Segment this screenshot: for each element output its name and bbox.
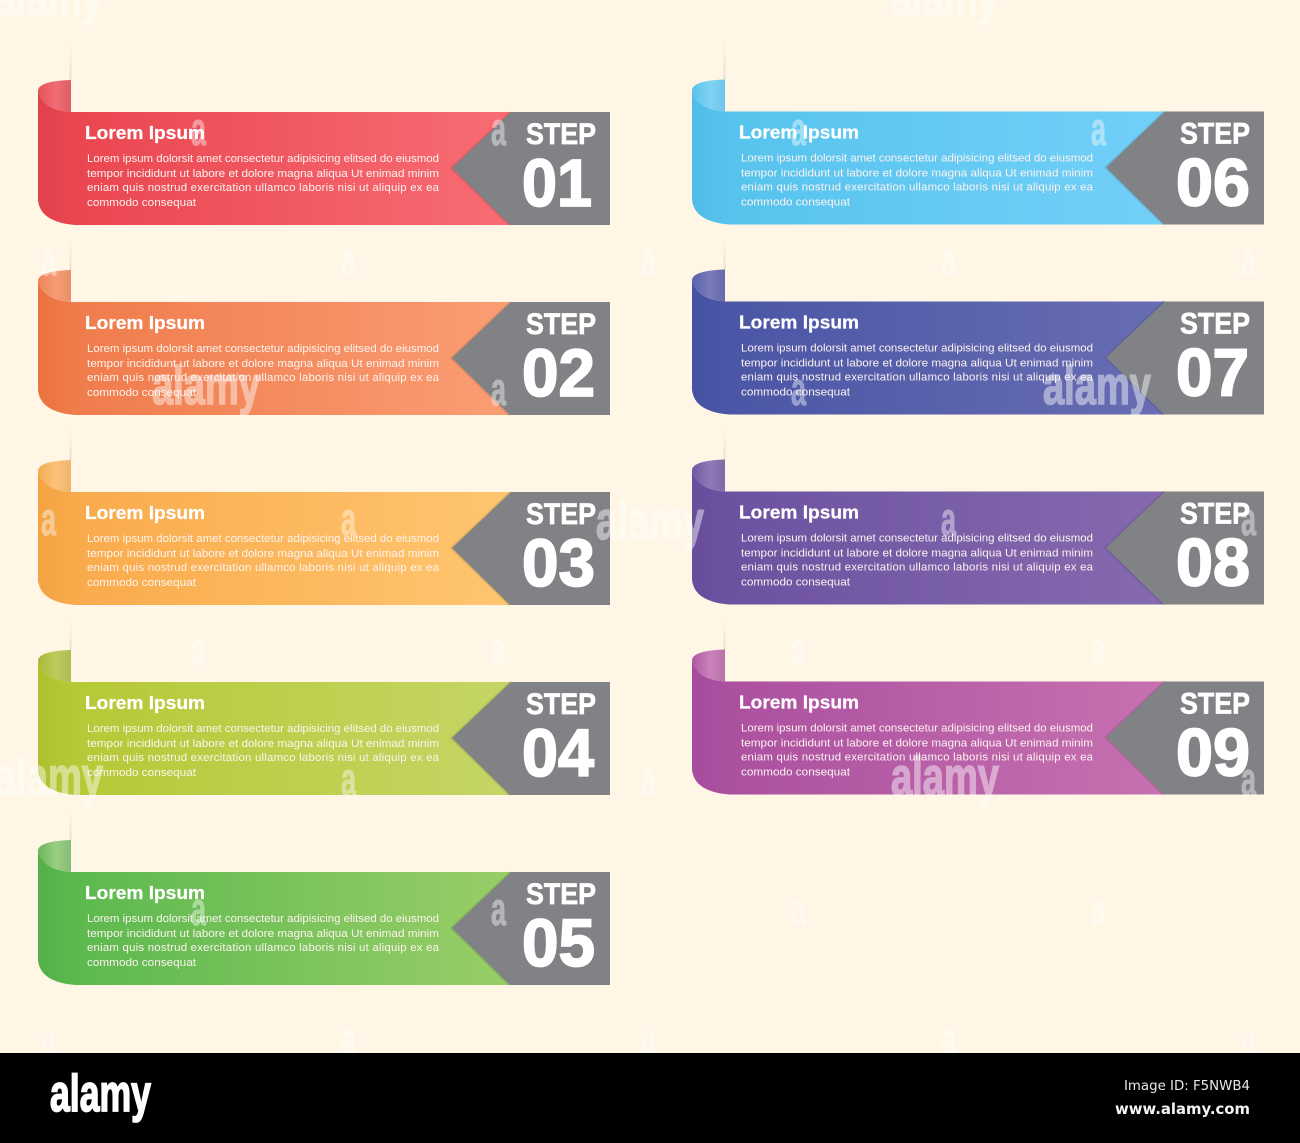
card: step 06: commodo consequat (741, 196, 851, 208)
watermarks: a (191, 883, 206, 935)
watermarks: a (1241, 753, 1256, 805)
card: step 05: Lorem ipsum dolorsit amet consectetur adipisicing elitsed do eiusmod (87, 913, 439, 925)
card: step 05: Lorem Ipsum (85, 882, 205, 903)
card: step 04: 04 (522, 716, 594, 791)
watermarks: a (341, 233, 356, 285)
watermarks: alamy (152, 356, 260, 416)
card: step 06 (692, 40, 1264, 224)
watermarks: a (341, 753, 356, 805)
watermarks: a (191, 623, 206, 675)
watermarks: a (491, 103, 506, 155)
card: step 08: tempor incididunt ut labore et dolore magna aliqua Ut enimad minim (741, 548, 1093, 560)
card: step 04: Lorem Ipsum (85, 692, 205, 713)
card: step 08 (692, 430, 1264, 604)
watermarks: a (791, 883, 806, 935)
card: step 07: commodo consequat (741, 386, 851, 398)
card: step 09: Lorem ipsum dolorsit amet consectetur adipisicing elitsed do eiusmod (741, 722, 1093, 734)
watermarks: a (341, 1013, 356, 1065)
card: step 08: Lorem Ipsum (739, 502, 859, 522)
card: step 04: tempor incididunt ut labore et dolore magna aliqua Ut enimad minim (87, 738, 439, 750)
card: step 08: eniam quis nostrud exercitation ullamco laboris nisi ut aliquip ex ea (741, 562, 1094, 574)
card: step 05 (38, 810, 610, 985)
card: step 03: Lorem Ipsum (85, 502, 205, 523)
card: step 05: tempor incididunt ut labore et dolore magna aliqua Ut enimad minim (87, 928, 439, 940)
watermarks: alamy (891, 747, 999, 807)
card: step 05: 05 (522, 906, 595, 981)
card: step 06: tempor incididunt ut labore et dolore magna aliqua Ut enimad minim (741, 168, 1093, 180)
watermarks: a (791, 103, 806, 155)
card: step 07: STEP (1180, 308, 1250, 340)
watermarks: a (491, 363, 506, 415)
card: step 08: commodo consequat (741, 576, 851, 588)
card: step 03: 03 (522, 526, 595, 601)
watermarks: a (191, 103, 206, 155)
watermarks: a (1091, 103, 1106, 155)
card: step 07: Lorem Ipsum (739, 312, 859, 332)
card: step 01: Lorem Ipsum (85, 122, 205, 143)
website: www.alamy.com (1115, 1100, 1250, 1118)
footer bar (0, 1053, 1300, 1143)
watermarks: a (491, 883, 506, 935)
card: step 02 (38, 240, 610, 415)
card: step 07: tempor incididunt ut labore et dolore magna aliqua Ut enimad minim (741, 358, 1093, 370)
image id: Image ID: F5NWB4 (1124, 1078, 1250, 1094)
card: step 01: tempor incididunt ut labore et dolore magna aliqua Ut enimad minim (87, 168, 439, 180)
card: step 02: STEP (526, 308, 596, 341)
card: step 06: Lorem ipsum dolorsit amet consectetur adipisicing elitsed do eiusmod (741, 152, 1093, 164)
card: step 03: Lorem ipsum dolorsit amet consectetur adipisicing elitsed do eiusmod (87, 533, 439, 545)
card: step 01: commodo consequat (87, 197, 197, 209)
card: step 02: 02 (522, 336, 595, 411)
watermarks: alamy (596, 491, 704, 551)
card: step 01: Lorem ipsum dolorsit amet consectetur adipisicing elitsed do eiusmod (87, 153, 439, 165)
card: step 01: 01 (522, 146, 592, 221)
watermarks: alamy (1043, 356, 1151, 416)
card: step 09 (692, 620, 1264, 794)
watermarks: a (941, 1013, 956, 1065)
card: step 07 (692, 240, 1264, 414)
watermarks: a (341, 493, 356, 545)
card: step 09: STEP (1180, 688, 1250, 720)
card: step 01 (38, 40, 610, 225)
watermarks: a (641, 1013, 656, 1065)
card: step 06: Lorem Ipsum (739, 122, 859, 142)
watermarks: a (1091, 623, 1106, 675)
card: step 07: Lorem ipsum dolorsit amet consectetur adipisicing elitsed do eiusmod (741, 342, 1093, 354)
watermarks: a (941, 493, 956, 545)
card: step 09: 09 (1176, 716, 1250, 790)
card: step 03: eniam quis nostrud exercitation ullamco laboris nisi ut aliquip ex ea (87, 562, 440, 574)
card: step 06: eniam quis nostrud exercitation ullamco laboris nisi ut aliquip ex ea (741, 182, 1094, 194)
card: step 05: STEP (526, 878, 596, 911)
watermarks: a (1091, 883, 1106, 935)
card: step 09: eniam quis nostrud exercitation ullamco laboris nisi ut aliquip ex ea (741, 752, 1094, 764)
card: step 02: Lorem Ipsum (85, 312, 205, 333)
card: step 02: eniam quis nostrud exercitation ullamco laboris nisi ut aliquip ex ea (87, 372, 440, 384)
card: step 07: 07 (1176, 336, 1249, 410)
card: step 02: tempor incididunt ut labore et dolore magna aliqua Ut enimad minim (87, 358, 439, 370)
watermarks: a (491, 623, 506, 675)
watermarks: a (1241, 493, 1256, 545)
card: step 04 (38, 620, 610, 795)
card: step 08: Lorem ipsum dolorsit amet consectetur adipisicing elitsed do eiusmod (741, 532, 1093, 544)
card: step 01: STEP (526, 118, 596, 151)
card: step 06: STEP (1180, 118, 1250, 150)
card: step 08: 08 (1176, 526, 1250, 600)
card: step 05: commodo consequat (87, 957, 197, 969)
watermarks: a (41, 1013, 56, 1065)
watermarks: a (41, 493, 56, 545)
card: step 03: tempor incididunt ut labore et dolore magna aliqua Ut enimad minim (87, 548, 439, 560)
card: step 08: STEP (1180, 498, 1250, 530)
watermarks: a (641, 753, 656, 805)
card: step 04: eniam quis nostrud exercitation ullamco laboris nisi ut aliquip ex ea (87, 752, 440, 764)
card: step 05: eniam quis nostrud exercitation ullamco laboris nisi ut aliquip ex ea (87, 942, 440, 954)
card: step 04: STEP (526, 688, 596, 721)
card: step 09: commodo consequat (741, 766, 851, 778)
card: step 02: Lorem ipsum dolorsit amet consectetur adipisicing elitsed do eiusmod (87, 343, 439, 355)
watermarks: a (791, 623, 806, 675)
card: step 09: tempor incididunt ut labore et dolore magna aliqua Ut enimad minim (741, 738, 1093, 750)
card: step 02: commodo consequat (87, 387, 197, 399)
card: step 03: commodo consequat (87, 577, 197, 589)
watermarks: a (941, 233, 956, 285)
watermarks: a (41, 233, 56, 285)
watermarks: a (1241, 1013, 1256, 1065)
card: step 06: 06 (1176, 146, 1250, 220)
card: step 01: eniam quis nostrud exercitation ullamco laboris nisi ut aliquip ex ea (87, 182, 440, 194)
card: step 07: eniam quis nostrud exercitation ullamco laboris nisi ut aliquip ex ea (741, 372, 1094, 384)
card: step 04: Lorem ipsum dolorsit amet consectetur adipisicing elitsed do eiusmod (87, 723, 439, 735)
card: step 09: Lorem Ipsum (739, 692, 859, 712)
card: step 03 (38, 430, 610, 605)
watermarks: a (1241, 233, 1256, 285)
watermarks: a (791, 363, 806, 415)
card: step 04: commodo consequat (87, 767, 197, 779)
alamy logo: alamy (50, 1065, 151, 1123)
watermarks: a (641, 233, 656, 285)
card: step 03: STEP (526, 498, 596, 531)
